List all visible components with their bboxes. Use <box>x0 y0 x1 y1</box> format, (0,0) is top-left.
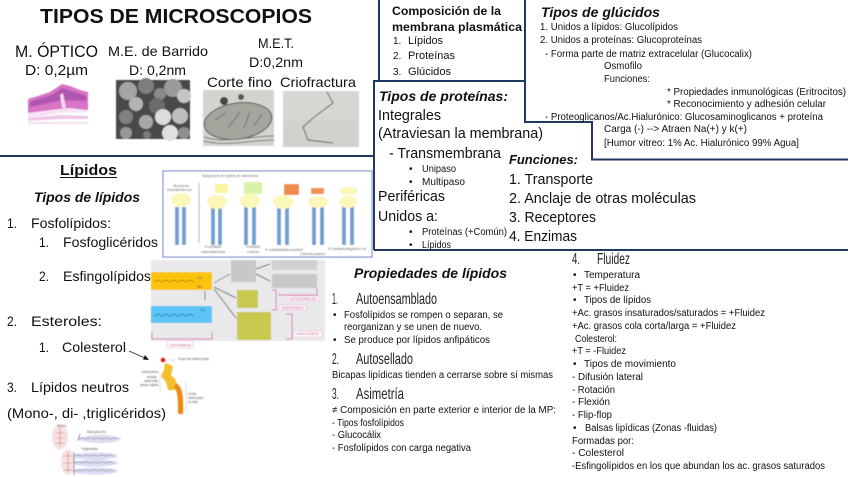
text block: perifericas: • <box>409 227 413 238</box>
text block: fluidez: • <box>573 270 577 281</box>
label: corte fino: Corte fino <box>207 74 272 90</box>
text block: fluidez: - Colesterol <box>572 448 624 459</box>
microscope: barrido: M.E. de Barrido <box>108 43 208 59</box>
text block: glucidos: Osmofilo <box>604 61 642 72</box>
chart: fosfolipidos bicapa <box>163 171 372 257</box>
heading: lipidos: Lípidos <box>60 162 117 179</box>
microscope: optico: D: 0,2µm <box>25 62 88 79</box>
list: tipos de lipidos: 2. <box>39 268 49 284</box>
list: tipos de lipidos: Esfingolípidos <box>63 268 151 284</box>
text block: fluidez <box>572 270 825 472</box>
section: autoensamblado: • <box>333 335 337 346</box>
list: componentes: 2. <box>393 51 401 62</box>
heading: composicion: membrana plasmática <box>392 20 522 34</box>
section: autoensamblado: 1. <box>332 291 338 308</box>
panel: tipos de microscopios <box>15 6 359 147</box>
list: tipos de lipidos: Fosfolípidos: <box>31 215 111 231</box>
list: funciones: 3. Receptores <box>509 209 596 226</box>
text block: perifericas <box>378 188 507 251</box>
text block: glucidos: Funciones: <box>604 74 650 85</box>
section: asimetria: - Tipos fosfolípidos <box>332 418 404 429</box>
text block: fluidez: • <box>573 359 577 370</box>
microscope: barrido <box>108 43 208 78</box>
text block: glucidos: Carga (-) --> Atraen Na(+) y k(+) <box>604 124 747 135</box>
list: funciones: 4. Enzimas <box>509 228 577 245</box>
component: esfingosina: OH <box>197 276 203 280</box>
heading: composicion <box>392 4 522 34</box>
panel: lipidos <box>7 162 372 475</box>
text block: fluidez: Formadas por: <box>572 436 634 447</box>
microscope: MET: D:0,2nm <box>249 54 303 70</box>
text block: glucidos: - Proteoglicanos/Ac.Hialurónico: Glucosaminoglicanos + proteína <box>545 112 823 123</box>
heading: propiedades: Propiedades de lípidos <box>354 265 507 281</box>
chart: fosfolipidos bicapa: fosfatídicos <box>167 188 192 192</box>
text block: glucidos: * Reconocimiento y adhesión celular <box>667 99 827 110</box>
chart: colesterol estructura: Estructura <box>142 370 158 374</box>
chart: colesterol estructura: plana rígida <box>140 383 158 387</box>
chart: fosfolipidos bicapa: Ácidos <box>173 184 189 188</box>
text block: fluidez: +Ac. grasos insaturados/saturados = +Fluidez <box>572 308 765 319</box>
list: funciones <box>509 171 696 245</box>
chart: colesterol estructura <box>140 357 210 414</box>
list: funciones: 2. Anclaje de otras moléculas <box>509 190 696 207</box>
text block: fluidez: Tipos de lípidos <box>584 295 651 306</box>
image: barrido celulas <box>116 78 191 141</box>
label: criofractura: Criofractura <box>280 74 356 90</box>
panel: tipos de glucidos <box>540 4 846 149</box>
list: componentes: Glúcidos <box>408 66 452 78</box>
text block: perifericas: Lípidos <box>422 240 451 251</box>
section: autoensamblado: reorganizan y se unen de nuevo. <box>344 322 482 333</box>
microscope: barrido: D: 0,2nm <box>129 62 186 78</box>
heading: fluidez <box>572 251 630 268</box>
text block: integrales: Integrales <box>378 107 441 124</box>
chart: colesterol estructura: hidrocarb. <box>188 396 204 400</box>
text block: integrales: (Atraviesan la membrana) <box>378 125 543 142</box>
text block: fluidez: - Difusión lateral <box>572 372 643 383</box>
section: autosellado <box>332 351 553 381</box>
text block: perifericas: Unidos a: <box>378 208 438 225</box>
chart: colesterol estructura: Grupo de cabeza polar <box>178 357 210 361</box>
microscope: optico: M. ÓPTICO <box>15 42 98 61</box>
subheading: tipos de lipidos: Tipos de lípidos <box>34 190 141 205</box>
list: componentes: 1. <box>393 36 401 47</box>
text block: fluidez: - Flexión <box>572 397 610 408</box>
image: criofractura <box>283 91 359 147</box>
title: TIPOS DE MICROSCOPIOS <box>40 6 312 28</box>
chart: esfingolipidos estructura: CERAMIDA <box>169 344 192 348</box>
section: autoensamblado: • <box>333 310 337 321</box>
text block: fluidez: +T = +Fluidez <box>572 283 629 294</box>
text block: perifericas: • <box>409 240 413 251</box>
text block: fluidez: +T = -Fluidez <box>572 346 626 357</box>
text block: perifericas: Periféricas <box>378 188 445 205</box>
microscope: optico <box>15 42 98 79</box>
chart: fosfolipidos bicapa: etanolamina <box>201 250 225 254</box>
section: asimetria <box>332 386 556 454</box>
chart: colesterol estructura: anular <box>147 375 158 379</box>
component: acido graso: OH <box>200 308 206 312</box>
chart: fosfolipidos bicapa: Cabezas polares <box>300 252 325 256</box>
section: asimetria: 3. <box>332 386 339 403</box>
component: esfingosina <box>151 272 212 290</box>
chart: esfingolipidos estructura <box>151 260 325 348</box>
section: autosellado: Bicapas lipídicas tienden a cerrarse sobre sí mismas <box>332 370 553 381</box>
heading: tipos de glucidos: Tipos de glúcidos <box>541 4 660 20</box>
text block: fluidez: Tipos de movimiento <box>584 359 676 370</box>
section: autosellado: 2. <box>332 351 339 368</box>
section: autoensamblado: Se produce por lípidos anfipáticos <box>344 335 490 346</box>
text block: integrales: - Transmembrana <box>389 145 502 162</box>
text block: integrales: • <box>409 164 413 175</box>
panel: composicion de la membrana <box>392 4 522 78</box>
chart: trigliceridos: Ácido graso libre <box>87 430 106 434</box>
chart: fosfolipidos bicapa: Fosfatidilinositol <box>265 248 303 252</box>
text block: glucidos <box>540 22 846 149</box>
chart: colesterol estructura: Cola <box>188 392 196 396</box>
list: tipos de lipidos: 1. <box>39 234 49 250</box>
text block: glucidos: - Forma parte de matriz extracelular (Glucocalix) <box>545 49 752 60</box>
list: componentes: Lípidos <box>408 35 443 47</box>
panel: propiedades de lipidos <box>332 265 556 454</box>
text block: glucidos: 1. Unidos a lípidos: Glucolípidos <box>540 22 678 33</box>
list: tipos de lipidos: Lípidos neutros <box>31 379 129 395</box>
text block: fluidez: +Ac. grasos cola corta/larga = +Fluidez <box>572 321 736 332</box>
heading: fluidez: 4. <box>572 251 580 268</box>
panel borders <box>0 0 848 250</box>
text block: fluidez: Colesterol: <box>575 334 617 345</box>
section: asimetria: - Glucocálix <box>332 430 381 441</box>
chart: fosfolipidos bicapa: Subgrupos de lípidos de membrana <box>202 174 258 178</box>
list: tipos de lipidos: 2. <box>7 313 17 329</box>
text block: fluidez: • <box>573 423 577 434</box>
text block: fluidez: -Esfingolípidos en los que abundan los ac. grasos saturados <box>572 461 825 472</box>
text block: glucidos: * Propiedades inmunológicas (Eritrocitos) <box>667 87 846 98</box>
list: funciones: 1. Transporte <box>509 171 593 188</box>
text block: fluidez: Temperatura <box>584 270 640 281</box>
text block: integrales <box>378 107 543 188</box>
list: tipos de lipidos: 1. <box>39 339 49 355</box>
list: tipos de lipidos: Colesterol <box>62 339 126 355</box>
section: autoensamblado <box>332 291 503 346</box>
image: tejido optico <box>28 84 88 124</box>
heading: composicion: Composición de la <box>392 4 501 18</box>
list: tipos de lipidos: Fosfoglicéridos <box>63 234 158 250</box>
chart: esfingolipidos estructura: GANGLIÓSIDOS <box>296 331 320 336</box>
heading: fluidez: Fluidez <box>597 251 630 268</box>
chart: fosfolipidos bicapa: Fosfatidilglicerol <box>328 247 366 251</box>
text block: integrales: • <box>409 177 413 188</box>
chart: fosfolipidos bicapa: Fosfatidil <box>246 245 260 249</box>
text block: fluidez: • <box>573 295 577 306</box>
chart: colesterol estructura: no polar <box>188 400 199 404</box>
list: tipos de lipidos <box>7 215 166 421</box>
section: asimetria: Asimetría <box>356 386 404 403</box>
text block: fluidez: Balsas lipídicas (Zonas -fluidas) <box>585 423 717 434</box>
microscope: MET: M.E.T. <box>258 36 294 51</box>
list: tipos de lipidos: 3. <box>7 379 17 395</box>
panel: tipos de proteinas <box>378 88 696 251</box>
chart: fosfolipidos bicapa: Fosfatidil <box>205 245 221 249</box>
chart: trigliceridos <box>52 424 121 475</box>
text block: perifericas: Proteínas (+Común) <box>422 227 507 238</box>
list: componentes: 3. <box>393 67 401 78</box>
section: autoensamblado: Autoensamblado <box>356 291 437 308</box>
list: componentes <box>393 35 455 78</box>
component: esfingosina: NH <box>197 285 203 289</box>
chart: esfingolipidos estructura: ESFINGOMIELINA <box>289 297 318 301</box>
text block: glucidos: 2. Unidos a proteínas: Glucoproteínas <box>540 35 702 46</box>
text block: fluidez: - Flip-flop <box>572 410 612 421</box>
microscope: MET <box>249 36 303 70</box>
heading: tipos de proteinas: Tipos de proteínas: <box>379 88 508 104</box>
text block: integrales: Unipaso <box>422 164 456 175</box>
list: tipos de lipidos: (Mono-, di- ,triglicéridos) <box>7 405 166 421</box>
section: asimetria: ≠ Composición en parte exterior e interior de la MP: <box>332 405 556 416</box>
component: acido graso <box>151 306 212 323</box>
image: corte fino mitocondria <box>202 90 274 146</box>
panel: fluidez <box>572 251 825 472</box>
text block: fluidez: - Rotación <box>572 385 615 396</box>
section: autosellado: Autosellado <box>356 351 413 368</box>
section: autoensamblado: Fosfolípidos se rompen o separan, se <box>344 310 503 321</box>
text block: integrales: Multipaso <box>422 177 465 188</box>
chart: colesterol estructura: esteroide <box>144 379 158 383</box>
list: componentes: Proteínas <box>408 50 455 62</box>
arrow: colesterol <box>129 351 149 360</box>
list: tipos de lipidos: 1. <box>7 215 17 231</box>
chart: fosfolipidos bicapa: colina <box>247 250 259 254</box>
chart: trigliceridos: Glicerol <box>57 424 66 428</box>
list: tipos de lipidos: Esteroles: <box>31 313 102 329</box>
heading: funciones: Funciones: <box>509 152 578 167</box>
text block: glucidos: [Humor vitreo: 1% Ac. Hialurónico 99% Agua] <box>604 138 799 149</box>
section: asimetria: - Fosfolípidos con carga negativa <box>332 443 471 454</box>
chart: trigliceridos: Triglicérido <box>81 447 98 451</box>
chart: esfingolipidos estructura: CEREBRÓSIDOS <box>281 305 305 310</box>
